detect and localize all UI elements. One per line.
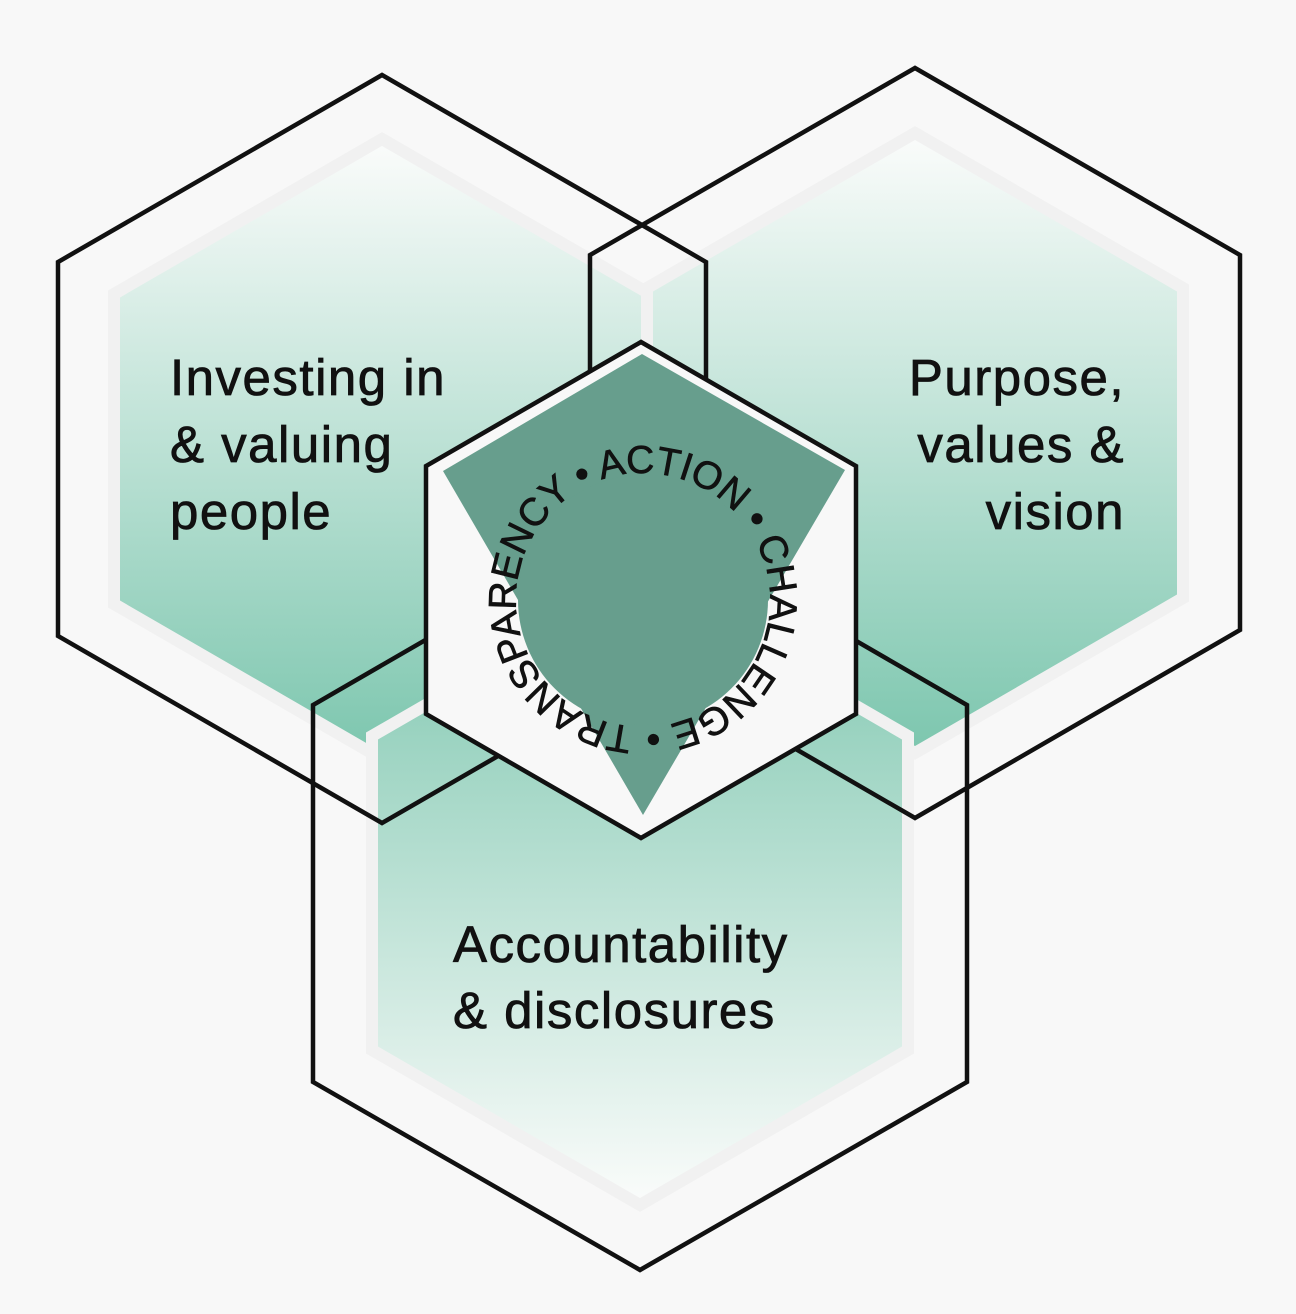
center hexagon <box>424 339 858 841</box>
label: purpose: Purpose, <box>909 349 1125 406</box>
panel: accountability (fill) <box>372 581 908 1205</box>
panel: purpose values vision (fill) <box>647 133 1183 753</box>
label: investing: & valuing <box>170 416 393 473</box>
panel: investing in people (fill) <box>114 139 650 759</box>
circular text: TRANSPARENCY • ACTION • CHALLENGE • <box>488 445 798 754</box>
label: accountability: & disclosures <box>453 982 776 1039</box>
center kite shape <box>443 354 845 815</box>
label: accountability: Accountability <box>453 916 789 973</box>
label: investing: Investing in <box>170 349 446 406</box>
label: purpose: vision <box>986 483 1125 540</box>
label: purpose: values & <box>917 416 1125 473</box>
label: investing: people <box>170 483 332 540</box>
